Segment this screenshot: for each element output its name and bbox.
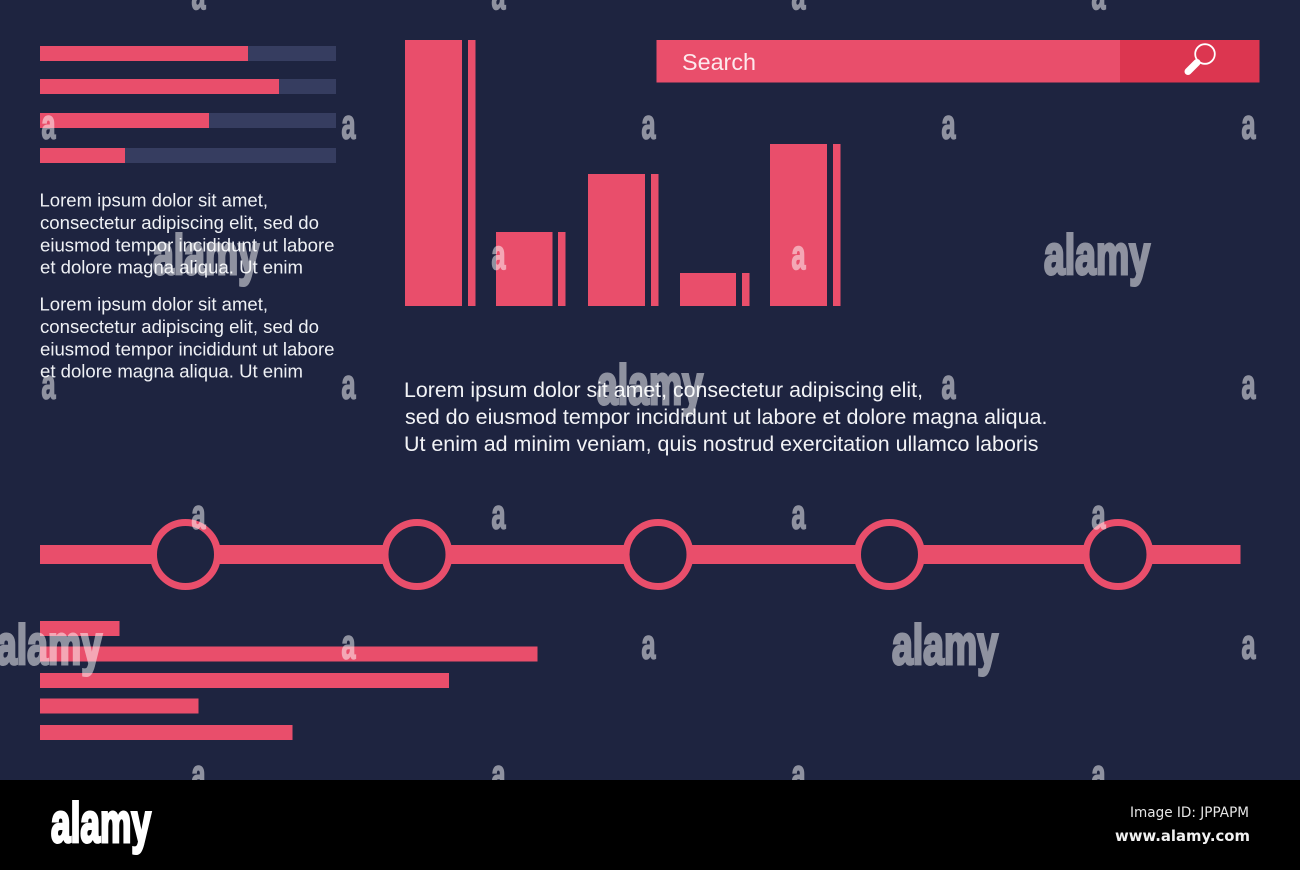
timeline [40,522,1240,586]
panel: progress bars [40,46,336,163]
watermark: small repeated letters: a [342,100,356,148]
watermark: small repeated letters: a [1092,750,1106,798]
watermark: small repeated letters: a [1242,360,1256,408]
text block: first paragraph: et dolore magna aliqua. Ut enim [40,258,303,278]
watermark: small repeated letters: a [192,490,206,538]
watermark: small repeated letters: a [942,100,956,148]
icon: magnifying glass [1188,44,1215,72]
timeline node 1 [154,522,218,586]
website address: www.alamy.com [1115,827,1250,845]
watermark: small repeated letters: a [792,750,806,798]
text block: central paragraph: sed do eiusmod tempor incididunt ut labore et dolore magna aliqua. [405,406,1048,429]
horizontal bar chart [40,621,538,740]
watermark: large logos [0,223,1150,676]
watermark: small repeated letters: a [942,360,956,408]
text block: second paragraph: eiusmod tempor incididunt ut labore [40,340,334,360]
footer band [0,780,1300,870]
watermark: large logos: alamy [892,613,998,676]
watermark: small repeated letters: a [342,620,356,668]
watermark: small repeated letters: a [342,360,356,408]
watermark: small repeated letters: a [792,231,806,278]
text block: first paragraph: consectetur adipiscing elit, sed do [40,213,319,233]
watermark: small repeated letters: a [642,100,656,148]
text block: first paragraph: eiusmod tempor incididunt ut labore [40,236,334,256]
bar chart [405,40,840,306]
watermark: small repeated letters: a [492,231,506,278]
watermark: small repeated letters: a [492,750,506,798]
watermark: small repeated letters: a [42,360,56,408]
text block: central paragraph: Lorem ipsum dolor sit amet, consectetur adipiscing elit, [404,379,923,402]
watermark: small repeated letters: a [192,750,206,798]
watermark: small repeated letters: a [1242,620,1256,668]
text block: second paragraph: et dolore magna aliqua. Ut enim [40,362,303,382]
watermark: small repeated letters: a [642,620,656,668]
watermark: small repeated letters: a [1092,490,1106,538]
text block: second paragraph [40,294,334,382]
timeline node 3 [626,522,690,586]
watermark: small repeated letters: a [492,490,506,538]
search bar [656,40,1260,82]
watermark: large logos: alamy [0,613,102,676]
watermark: large logos: alamy [153,223,259,286]
timeline node 5 [1086,522,1150,586]
watermark: large logos: alamy [1044,223,1150,286]
text block: second paragraph: consectetur adipiscing elit, sed do [40,317,319,337]
timeline node 4 [858,522,922,586]
watermark: large logos: alamy [597,353,703,416]
search label: Search [682,49,756,75]
watermark: small repeated letters: a [1242,100,1256,148]
image id: Image ID: JPPAPM [1130,805,1249,821]
text block: first paragraph: Lorem ipsum dolor sit amet, [40,190,268,210]
text block: second paragraph: Lorem ipsum dolor sit amet, [40,294,268,314]
timeline node 2 [385,522,449,586]
watermark: small repeated letters: a [42,100,56,148]
footer logo: alamy [51,791,151,854]
text block: central paragraph [404,379,1048,456]
text block: central paragraph: Ut enim ad minim veniam, quis nostrud exercitation ullamco laboris [404,433,1038,456]
watermark: small repeated letters: a [792,490,806,538]
text block: first paragraph [40,190,334,278]
